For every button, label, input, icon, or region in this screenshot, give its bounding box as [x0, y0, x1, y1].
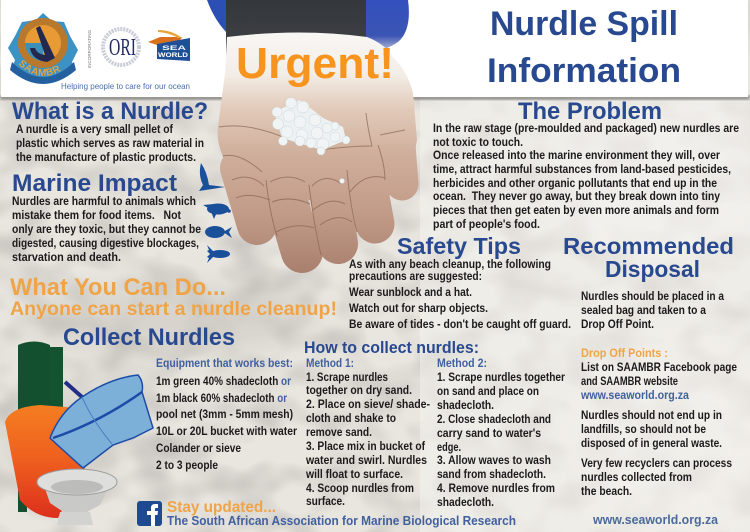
method 2: 3. Allow waves to wash	[437, 455, 551, 467]
icon: turtle	[203, 204, 231, 219]
equipment list: 2 to 3 people	[156, 460, 218, 472]
text block: digested, causing digestive blockages,	[12, 238, 199, 250]
footer: website: www.seaworld.org.za	[592, 512, 719, 527]
method 1: 4. Scoop nurdles from	[306, 483, 414, 495]
method 1: cloth and shake to	[306, 413, 396, 425]
method 1: will float to surface.	[305, 469, 403, 481]
text block: plastic which serves as raw material in	[16, 138, 204, 150]
heading: How to collect nurdles:	[304, 339, 479, 357]
icon: bird	[199, 163, 225, 191]
text block: starvation and death.	[12, 252, 121, 264]
text block	[433, 123, 739, 231]
sleeve	[207, 0, 409, 76]
text block: pieces that then get eaten by even more animals and form	[433, 205, 719, 217]
finger gaps and creases	[219, 113, 405, 255]
logo: Oceanographic Research Institute: ORI	[109, 35, 136, 61]
heading: Safety Tips	[397, 233, 521, 259]
text block: Wear sunblock and a hat.	[349, 287, 472, 299]
text block	[349, 259, 571, 331]
text block: drop off points: and SAAMBR website	[581, 376, 678, 388]
text block: precautions are suggested:	[349, 271, 482, 283]
equipment list: 10L or 20L bucket with water	[156, 426, 297, 438]
method 1: water and swirl. Nurdles	[305, 455, 427, 467]
text block	[16, 124, 204, 164]
method 2: edge.	[437, 442, 461, 454]
text block: drop off points	[580, 346, 737, 402]
section: What is a Nurdle	[12, 98, 208, 164]
pool net	[50, 375, 153, 468]
section: What You Can Do	[10, 274, 337, 320]
section: Safety Tips	[349, 233, 571, 331]
section: Marine Impact	[12, 163, 232, 264]
text block: drop off points: Drop Off Points :	[581, 346, 668, 360]
heading: Disposal	[605, 256, 700, 282]
equipment list: pool net (3mm - 5mm mesh)	[156, 409, 293, 421]
text block	[12, 196, 201, 264]
text block: herbicides and other organic pollutants that end up in the	[433, 178, 717, 190]
method 1: 1. Scrape nurdles	[306, 372, 388, 384]
panel: title	[370, 0, 750, 100]
equipment list: 1m black 60% shadecloth or	[156, 393, 287, 405]
icon: lobster	[207, 245, 230, 263]
text block: mistake them for food items. Not	[12, 210, 181, 222]
logo: uShaka Sea World	[148, 30, 190, 61]
heading: Recommended	[563, 233, 734, 259]
method 1: surface.	[306, 496, 345, 508]
section: The Problem	[433, 98, 739, 231]
tagline: Helping people to care for our ocean	[61, 81, 190, 91]
text block: As with any beach cleanup, the following	[349, 259, 551, 271]
logo: incorporating label: INCORPORATING	[87, 30, 92, 68]
organisation name: The South African Association for Marine Biological Research	[167, 513, 516, 528]
method 1: together on dry sand.	[306, 385, 412, 397]
text block: recyclers	[581, 458, 732, 498]
method 1: remove sand.	[306, 427, 372, 439]
text block: landfills: landfills, so should not be	[581, 424, 706, 436]
method 2: shadecloth.	[437, 497, 494, 509]
text block: the manufacture of plastic products.	[16, 152, 196, 164]
text block: part of people's food.	[433, 219, 540, 231]
text block: recyclers: the beach.	[581, 486, 632, 498]
method 1: Method 1:	[306, 356, 354, 370]
text block: not toxic to touch.	[433, 137, 523, 149]
panel: logos header	[0, 0, 226, 100]
method 2: on sand and place on	[437, 386, 539, 398]
text block: Watch out for sharp objects.	[349, 303, 488, 315]
heading: What You Can Do...	[10, 274, 226, 301]
section: How to collect nurdles	[304, 339, 565, 509]
method 2: 1. Scrape nurdles together	[437, 372, 565, 384]
hand	[218, 32, 417, 255]
heading: Marine Impact	[12, 170, 177, 197]
text block: only are they toxic, but they cannot be	[12, 224, 201, 236]
stay updated: Stay updated...	[167, 499, 276, 516]
method 2: 4. Remove nurdles from	[437, 483, 555, 495]
text block: placement	[581, 291, 725, 331]
fingers	[240, 105, 402, 252]
footer: social	[137, 499, 516, 528]
title line 2: Information	[487, 52, 681, 90]
logo: SAAMBR badge: SAAMBR	[19, 60, 61, 76]
equipment list: Equipment that works best:	[156, 356, 293, 370]
text block: landfills	[581, 410, 722, 450]
section: Collect Nurdles	[5, 324, 297, 525]
illustration: equipment	[5, 342, 153, 525]
text block: Be aware of tides - don't be caught off guard.	[349, 319, 571, 331]
logo: SAAMBR badge	[8, 13, 78, 84]
text block: Nurdles are harmful to animals which	[12, 196, 196, 208]
text block: recyclers: nurdles collected from	[581, 472, 692, 484]
title line 1: Nurdle Spill	[490, 5, 678, 43]
text block: recyclers: Very few recyclers can process	[581, 458, 732, 470]
heading: What is a Nurdle?	[12, 98, 208, 125]
method 1: 2. Place on sieve/ shade-	[306, 399, 430, 411]
text block: placement: Drop Off Point.	[581, 319, 654, 331]
text block: landfills: disposed of in general waste.	[581, 438, 722, 450]
equipment list: 1m green 40% shadecloth or	[156, 376, 291, 388]
nurdles	[272, 98, 350, 184]
method 2: 2. Close shadecloth and	[437, 414, 551, 426]
icon: fish	[205, 226, 232, 238]
colander	[37, 469, 117, 525]
heading: Collect Nurdles	[63, 324, 235, 351]
method 2: carry sand to water's	[437, 428, 541, 440]
subheading: Anyone can start a nurdle cleanup!	[10, 299, 337, 320]
logo: Oceanographic Research Institute	[103, 29, 139, 65]
method 2: Method 2:	[437, 356, 487, 370]
heading: The Problem	[518, 98, 662, 125]
text block: Once released into the marine environment they will, over	[433, 150, 720, 162]
text block: placement: sealed bag and taken to a	[581, 305, 707, 317]
logo: uShaka Sea World: WORLD	[158, 52, 188, 59]
palm	[218, 32, 417, 200]
shadecloth rolls	[18, 342, 63, 512]
bucket	[5, 405, 85, 518]
method 2	[437, 356, 565, 509]
photo: hand holding nurdles	[207, 0, 417, 255]
headline: Urgent: Urgent!	[236, 39, 394, 88]
method 1: 3. Place mix in bucket of	[306, 441, 425, 453]
text block: ocean. They never go away, but they break down into tiny	[433, 191, 721, 203]
heading	[563, 233, 734, 282]
equipment list	[156, 356, 297, 472]
method 2: sand from shadecloth.	[437, 469, 546, 481]
equipment list: Colander or sieve	[156, 443, 241, 455]
text block: landfills: Nurdles should not end up in	[581, 410, 722, 422]
text block: drop off points: www.seaworld.org.za	[580, 388, 689, 402]
section: Recommended Disposal	[563, 233, 737, 498]
logo: uShaka Sea World: SEA	[162, 46, 187, 52]
icon: facebook	[137, 501, 162, 526]
method 1	[305, 356, 430, 508]
text block: placement: Nurdles should be placed in a	[581, 291, 725, 303]
text block: A nurdle is a very small pellet of	[16, 124, 173, 136]
method 2: shadecloth.	[437, 400, 494, 412]
